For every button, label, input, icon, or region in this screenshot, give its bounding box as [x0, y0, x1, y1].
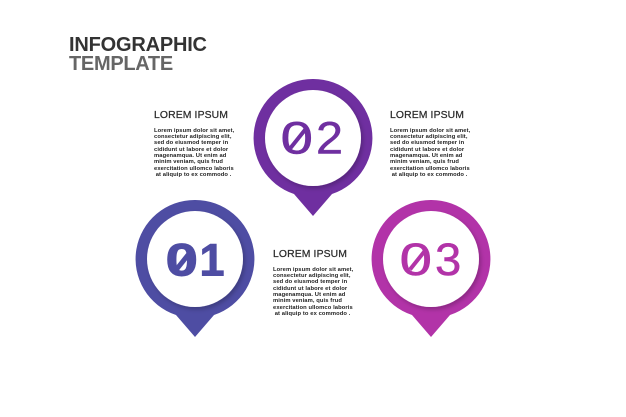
body text [390, 128, 470, 178]
title [69, 34, 207, 75]
body text: magenamqua. Ut enim ad [273, 292, 345, 298]
body text: exercitation ullomco laboris [390, 166, 470, 172]
body text: at aliquip to ex commodo . [392, 172, 467, 178]
body text: exercitation ullomco laboris [154, 166, 234, 172]
body text: sed do eiusmod temper in [390, 140, 464, 146]
number 01: 1 [200, 234, 225, 286]
body text: consectetur adipiscing elit, [390, 134, 468, 140]
number 03: 3 [435, 234, 461, 285]
pin 02 [254, 79, 372, 216]
body text: at aliquip to ex commodo . [275, 311, 350, 317]
heading: LOREM IPSUM [273, 249, 347, 260]
title line 2: TEMPLATE [69, 53, 173, 75]
number 03 [400, 234, 461, 285]
number 03: 0 [400, 235, 432, 285]
body text: magenamqua. Ut enim ad [390, 153, 462, 159]
number 02: 2 [316, 113, 343, 163]
heading: LOREM IPSUM [390, 110, 464, 121]
body text: magenamqua. Ut enim ad [154, 153, 226, 159]
body text: consectetur adipiscing elit, [154, 134, 232, 140]
body text [273, 266, 353, 317]
body text: Lorem ipsum dolor sit amet, [390, 128, 470, 134]
body text: consectetur adipiscing elit, [273, 273, 351, 279]
number 01: 0 [166, 236, 198, 286]
body text: cididunt ut labore et dolor [390, 147, 464, 153]
body text [154, 128, 234, 178]
body text: minim veniam, quis frud [273, 298, 342, 304]
number 01 [166, 234, 225, 286]
body text: cididunt ut labore et dolor [154, 147, 228, 153]
body text: minim veniam, quis frud [154, 159, 223, 165]
number 02 [280, 113, 343, 164]
body text: at aliquip to ex commodo . [156, 172, 231, 178]
text block bottom center [273, 249, 353, 317]
number 02: 0 [280, 114, 313, 164]
body text: minim veniam, quis frud [390, 159, 459, 165]
heading: LOREM IPSUM [154, 110, 228, 121]
pin 01 [136, 200, 254, 337]
body text: sed do eiusmod temper in [154, 140, 228, 146]
text block top left [154, 110, 234, 178]
body text: exercitation ullomco laboris [273, 305, 353, 311]
body text: sed do eiusmod temper in [273, 279, 347, 285]
body text: Lorem ipsum dolor sit amet, [154, 128, 234, 134]
body text: cididunt ut labore et dolor [273, 286, 347, 292]
body text: Lorem ipsum dolor sit amet, [273, 266, 353, 272]
text block top right [390, 110, 470, 178]
title line 1: INFOGRAPHIC [69, 34, 207, 56]
pin 03 [372, 200, 490, 337]
